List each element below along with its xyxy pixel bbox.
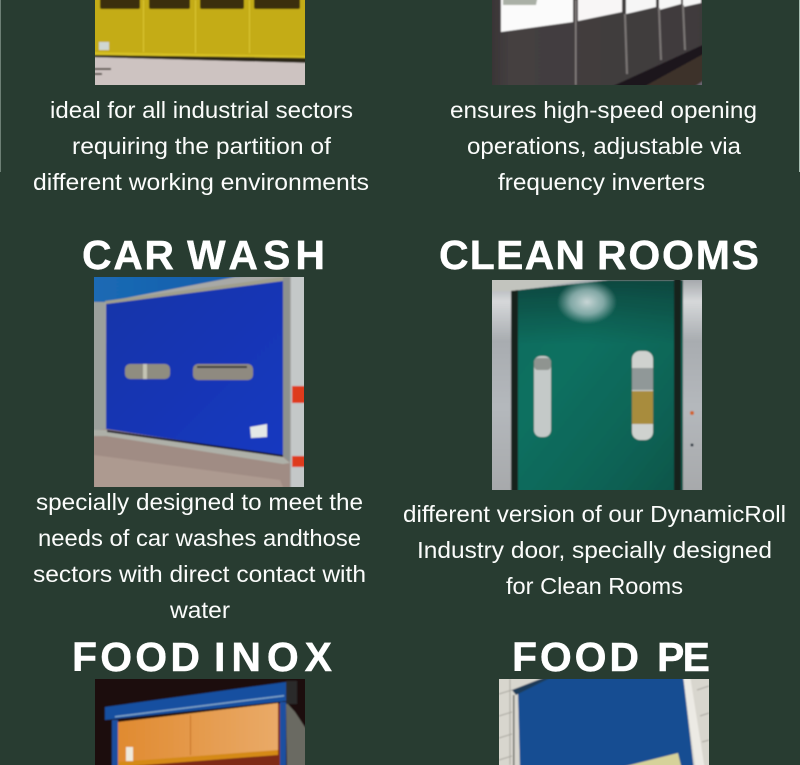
photo: orange food inox door	[90, 674, 310, 765]
photo: green clean room door	[488, 275, 708, 495]
text: partition door description	[33, 97, 369, 195]
right edge line	[799, 0, 800, 172]
heading: clean rooms: CLEAN	[439, 232, 585, 278]
text: high-speed door description	[450, 97, 757, 195]
text: car wash description: sectors with direct contact with	[33, 561, 366, 587]
heading: food pe: PE	[657, 634, 710, 680]
heading: food inox: INOX	[214, 634, 332, 680]
text: high-speed door description: ensures high-speed opening	[450, 97, 757, 123]
text: clean rooms description: Industry door, specially designed	[417, 537, 772, 563]
heading: car wash: CAR	[82, 232, 174, 278]
text: clean rooms description: for Clean Rooms	[506, 573, 683, 599]
heading: food inox	[72, 634, 332, 680]
heading: food pe: FOOD	[512, 634, 639, 680]
heading: car wash	[82, 232, 325, 278]
text: high-speed door description: operations, adjustable via	[467, 133, 741, 159]
heading: clean rooms: ROOMS	[597, 232, 759, 278]
text: car wash description	[33, 489, 366, 623]
text: car wash description: water	[169, 597, 230, 623]
text: clean rooms description: different version of our DynamicRoll	[403, 501, 786, 527]
heading: food inox: FOOD	[72, 634, 200, 680]
heading: food pe	[512, 634, 710, 680]
photo: grey high-speed door	[487, 0, 707, 90]
text: partition door description: requiring the partition of	[72, 133, 332, 159]
text: partition door description: ideal for all industrial sectors	[50, 97, 353, 123]
photo: yellow partition door	[90, 0, 310, 90]
heading: clean rooms	[439, 232, 759, 278]
text: car wash description: specially designed to meet the	[36, 489, 363, 515]
left edge line	[0, 0, 1, 172]
photo: blue food PE door	[495, 675, 715, 765]
heading: car wash: WASH	[187, 232, 325, 278]
photo: blue car wash door	[90, 272, 310, 492]
text: high-speed door description: frequency inverters	[498, 169, 705, 195]
text: car wash description: needs of car washes andthose	[38, 525, 361, 551]
text: partition door description: different working environments	[33, 169, 369, 195]
text: clean rooms description	[403, 501, 786, 599]
